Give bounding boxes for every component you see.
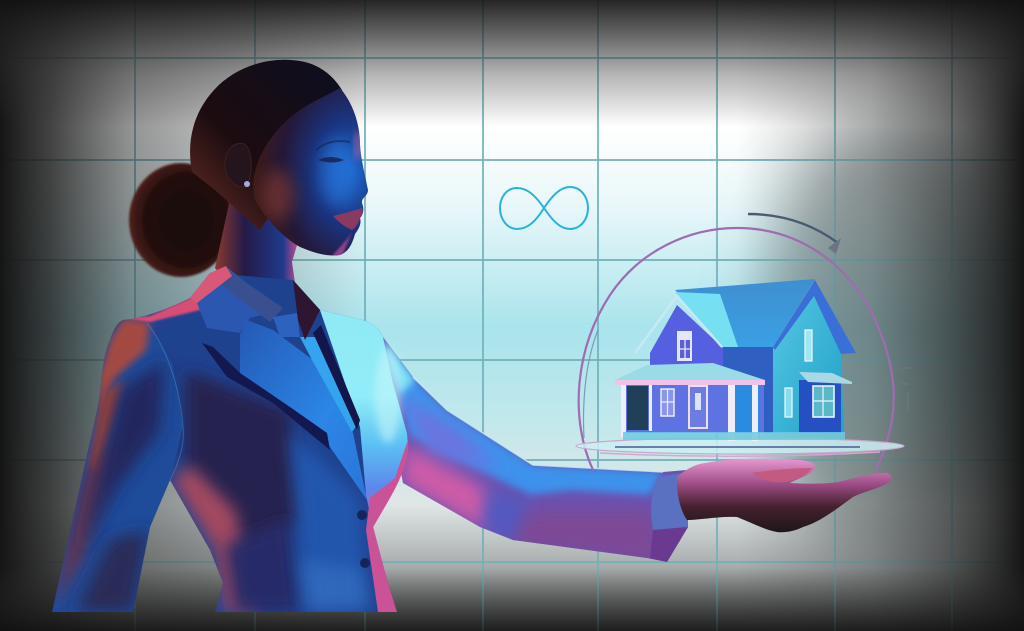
cuff [651,472,688,530]
eyebrow [316,141,350,150]
buttons [357,510,370,568]
door [689,386,707,428]
hair [190,60,342,230]
neck [215,190,300,320]
jacket sleeve [52,320,183,612]
face [253,88,368,255]
right bay window [813,386,834,417]
cyan roof slope [675,292,738,347]
lips [333,208,363,230]
pink collar edge [190,266,232,303]
centre wall [723,347,773,433]
shirt [300,337,357,432]
main roof [675,279,815,347]
infinity symbol [500,187,588,229]
left gable wall [650,305,723,366]
blue porch bay [736,386,760,432]
shirt collar [210,268,283,322]
chest glow [375,347,401,443]
upper lapel [197,268,280,333]
arm [383,337,688,562]
dark neck opening [293,280,320,340]
earring [244,181,250,187]
arm light rim [413,377,663,472]
dome and house [576,214,910,532]
woman [52,60,700,612]
sleeve seam [147,323,183,480]
torso jacket [52,273,408,612]
lower lapel [240,320,367,500]
house [615,279,856,441]
small side marks [900,368,910,412]
sleeve end [650,527,688,562]
ear [225,143,251,187]
dark shirt stripe [313,325,360,430]
glass dome [579,228,894,472]
eye [318,157,344,162]
right upper window [805,330,812,361]
lapel shadow [202,343,330,450]
porch columns [621,385,758,441]
right bay recess [799,380,841,433]
porch window [661,389,674,416]
arc end tab [828,238,841,254]
upper window [677,331,692,361]
porch dark opening [627,386,648,430]
collar point [273,313,300,337]
right gable edge [773,280,856,354]
right awning [799,372,852,384]
porch roof fascia [615,380,765,385]
hair bun [129,163,233,277]
palm shadow [752,468,812,482]
house base [623,432,845,440]
left gable trim [635,296,722,353]
arc accent [748,214,838,243]
dome inner line [584,330,598,438]
porch roof [615,363,765,380]
porch wall [624,385,764,433]
face shading [262,132,362,256]
chest light panel [320,310,408,527]
jacket shading [52,268,370,612]
right lower window [785,388,792,417]
platform [576,438,904,456]
right wall [773,283,844,433]
hand [677,459,892,532]
pink side rim [366,440,408,612]
